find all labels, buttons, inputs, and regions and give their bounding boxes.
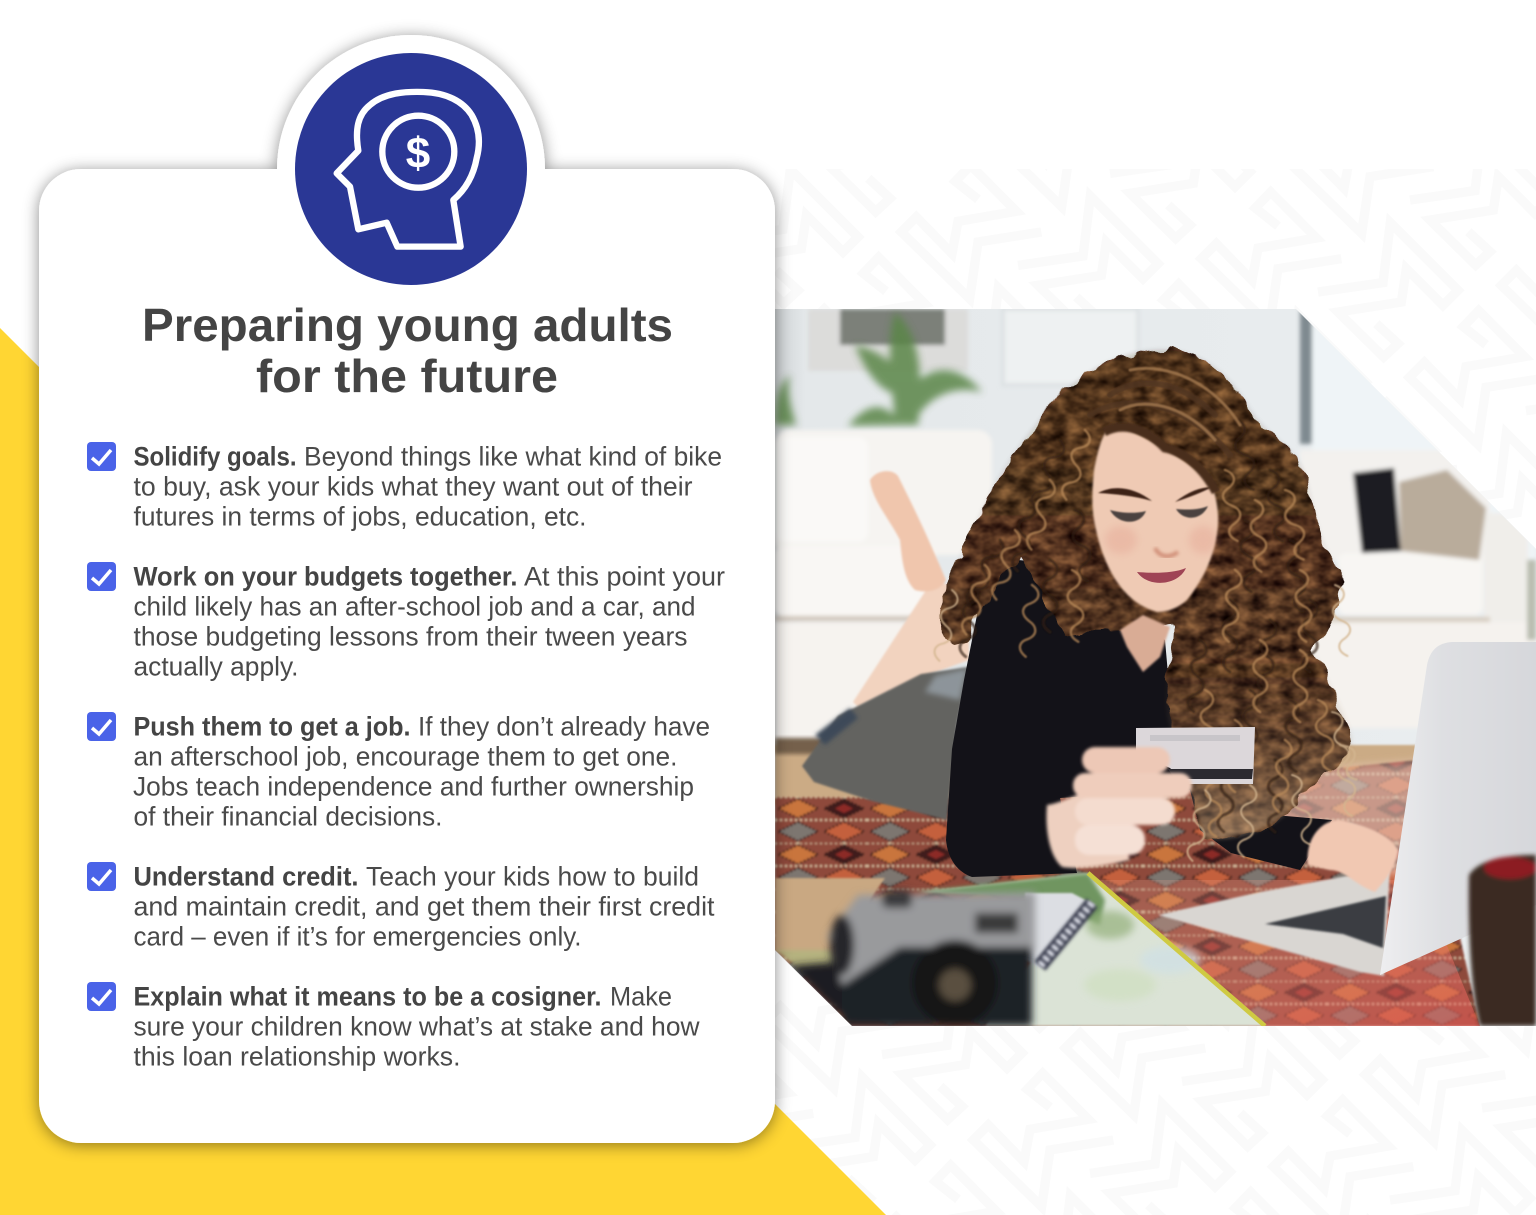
neck xyxy=(1120,615,1170,672)
plant xyxy=(775,312,982,426)
checklist item: credit xyxy=(87,862,715,952)
icon: head with dollar sign xyxy=(295,53,527,285)
icon: checkbox xyxy=(87,982,116,1011)
right hand xyxy=(1308,820,1398,892)
bare floor, lower left xyxy=(775,878,885,960)
laptop base xyxy=(1158,868,1390,976)
checklist item: budgets: those budgeting lessons from their tween years xyxy=(134,622,688,652)
checklist item: budgets: At this point your xyxy=(524,562,725,592)
icon: checkbox xyxy=(87,862,116,891)
title xyxy=(142,299,673,402)
title: Preparing young adults xyxy=(142,299,673,351)
rug xyxy=(775,760,1480,1026)
checklist item: budgets: child likely has an after-school job and a car, and xyxy=(134,592,696,622)
icon: head with dollar sign: $ xyxy=(406,129,430,178)
hair ringlets xyxy=(933,368,1363,862)
credit card xyxy=(1136,727,1255,784)
hair main mass xyxy=(940,350,1352,839)
skirt xyxy=(802,667,969,820)
checklist item: budgets xyxy=(87,562,725,682)
checklist item: job: Jobs teach independence and further ownership xyxy=(133,772,694,802)
checklist item: solidify goals: to buy, ask your kids what they want out of their xyxy=(134,472,693,502)
right sofa and pillows xyxy=(1300,450,1536,728)
black top with sleeves xyxy=(946,560,1332,877)
checklist item: job: of their financial decisions. xyxy=(134,802,442,832)
checklist item: credit: Understand credit. xyxy=(134,862,358,892)
white card with head badge tab xyxy=(39,35,775,1143)
floor xyxy=(775,744,1415,805)
checklist item: job: Push them to get a job. xyxy=(134,712,410,742)
camera xyxy=(790,890,1035,1026)
checklist item: credit: and maintain credit, and get them their first credit xyxy=(134,892,715,922)
checklist item: cosigner xyxy=(87,982,700,1072)
checklist item: solidify goals xyxy=(87,442,722,532)
checklist item: cosigner: sure your children know what’s at stake and how xyxy=(134,1012,700,1042)
checklist item: budgets: actually apply. xyxy=(134,652,298,682)
yellow diagonal accent xyxy=(0,328,886,1215)
map xyxy=(915,873,1265,1026)
checklist item: cosigner: this loan relationship works. xyxy=(134,1042,460,1072)
checklist item: budgets: Work on your budgets together. xyxy=(134,562,518,592)
left sofa xyxy=(775,430,992,740)
photo: young woman holding a credit card at a laptop xyxy=(775,309,1536,1026)
chevron background pattern xyxy=(775,169,1536,1215)
icon: checkbox xyxy=(87,442,116,471)
leg and foot xyxy=(853,471,969,707)
checklist item: solidify goals: Beyond things like what kind of bike xyxy=(304,442,722,472)
checklist item: job: an afterschool job, encourage them to get one. xyxy=(134,742,678,772)
hand holding card xyxy=(1046,747,1192,868)
icon: checkbox xyxy=(87,712,116,741)
title: for the future xyxy=(256,350,558,402)
checklist item: job xyxy=(87,712,710,832)
laptop lid xyxy=(1380,642,1536,975)
cup xyxy=(1469,855,1536,1026)
checklist item: credit: card – even if it’s for emergencies only. xyxy=(134,922,582,952)
fringe over forehead xyxy=(1104,427,1216,492)
checklist item: solidify goals: futures in terms of jobs, education, etc. xyxy=(134,502,586,532)
notebook xyxy=(1025,893,1095,968)
face xyxy=(1092,428,1218,612)
icon: checkbox xyxy=(87,562,116,591)
checklist item: credit: Teach your kids how to build xyxy=(366,862,699,892)
checklist item: solidify goals: Solidify goals. xyxy=(134,442,296,472)
hair tonal shading xyxy=(940,350,1352,839)
checklist item: cosigner: Make xyxy=(610,982,672,1012)
checklist item: job: If they don’t already have xyxy=(418,712,710,742)
checklist item: cosigner: Explain what it means to be a cosigner. xyxy=(134,982,602,1012)
